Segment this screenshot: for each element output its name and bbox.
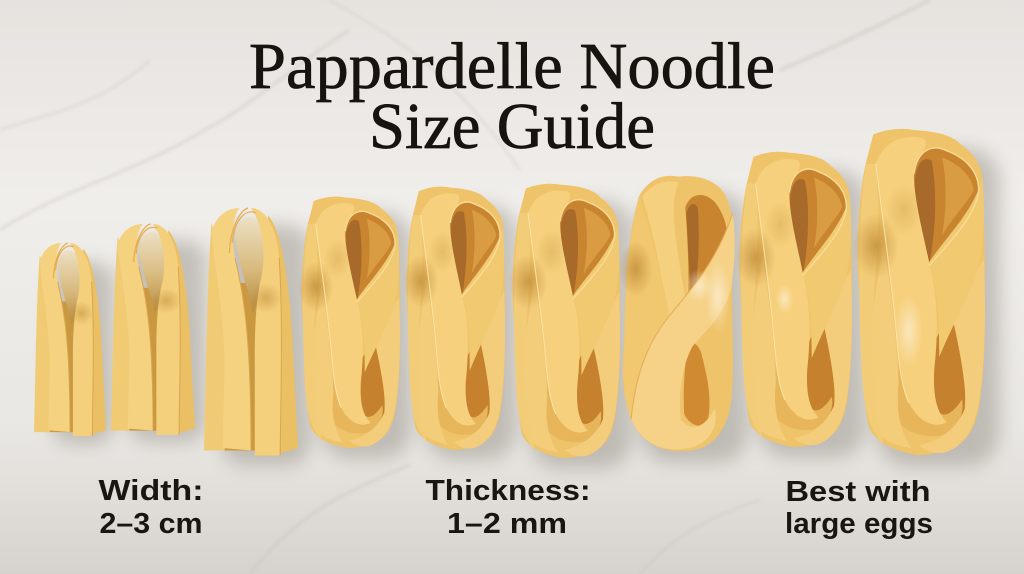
label: best with large eggs: large eggs	[785, 508, 933, 540]
label: thickness	[426, 475, 590, 540]
noodle bundle 4	[298, 197, 400, 448]
label: width: Width:	[98, 475, 204, 507]
label: best with large eggs: Best with	[786, 476, 930, 508]
label: thickness: 1–2 mm	[447, 508, 567, 540]
noodle bundle 8	[736, 152, 852, 447]
label: thickness: Thickness:	[426, 475, 590, 507]
noodle bundle 2	[111, 224, 195, 435]
noodle shadows	[52, 148, 1000, 468]
noodle bundle 9	[853, 129, 985, 455]
noodle bundle 1	[34, 243, 106, 436]
noodle bundle 7	[619, 176, 735, 451]
noodle bundle 6	[509, 184, 620, 458]
noodle bundle 3	[204, 208, 298, 456]
label: width: 2–3 cm	[100, 508, 202, 540]
title: Pappardelle Noodle	[249, 30, 775, 103]
title: Size Guide	[369, 90, 655, 163]
noodle bundle 5	[403, 187, 505, 450]
label: best with large eggs	[785, 476, 933, 540]
label: width	[98, 475, 204, 540]
title	[249, 30, 775, 163]
